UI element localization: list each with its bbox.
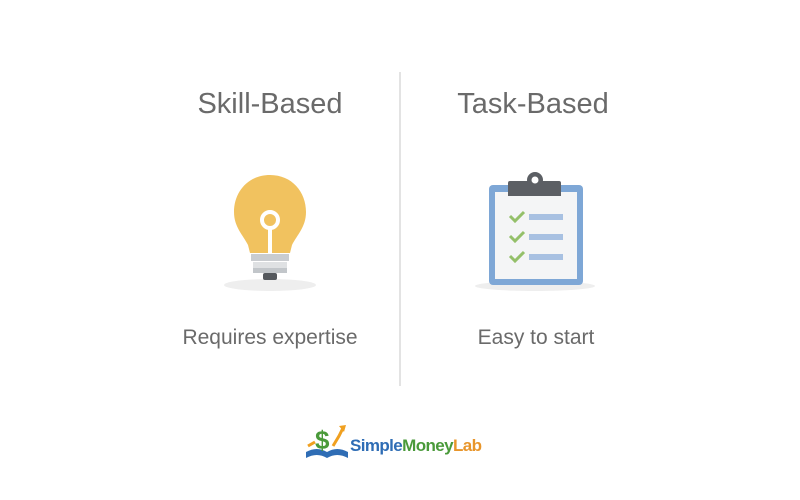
icon: clipboard checklist bbox=[475, 172, 595, 291]
icon: logo mark: $ bbox=[315, 425, 330, 455]
divider bbox=[399, 72, 401, 386]
icon: logo mark bbox=[306, 425, 348, 458]
text: SimpleMoneyLab: SimpleMoneyLab bbox=[350, 436, 481, 455]
icon: light bulb bbox=[224, 175, 316, 291]
heading: Task-Based: Task-Based bbox=[457, 88, 609, 120]
logo bbox=[306, 425, 482, 458]
text: Easy to start: Easy to start bbox=[478, 326, 594, 349]
heading: Skill-Based: Skill-Based bbox=[197, 88, 343, 120]
text: Requires expertise: Requires expertise bbox=[182, 326, 358, 349]
